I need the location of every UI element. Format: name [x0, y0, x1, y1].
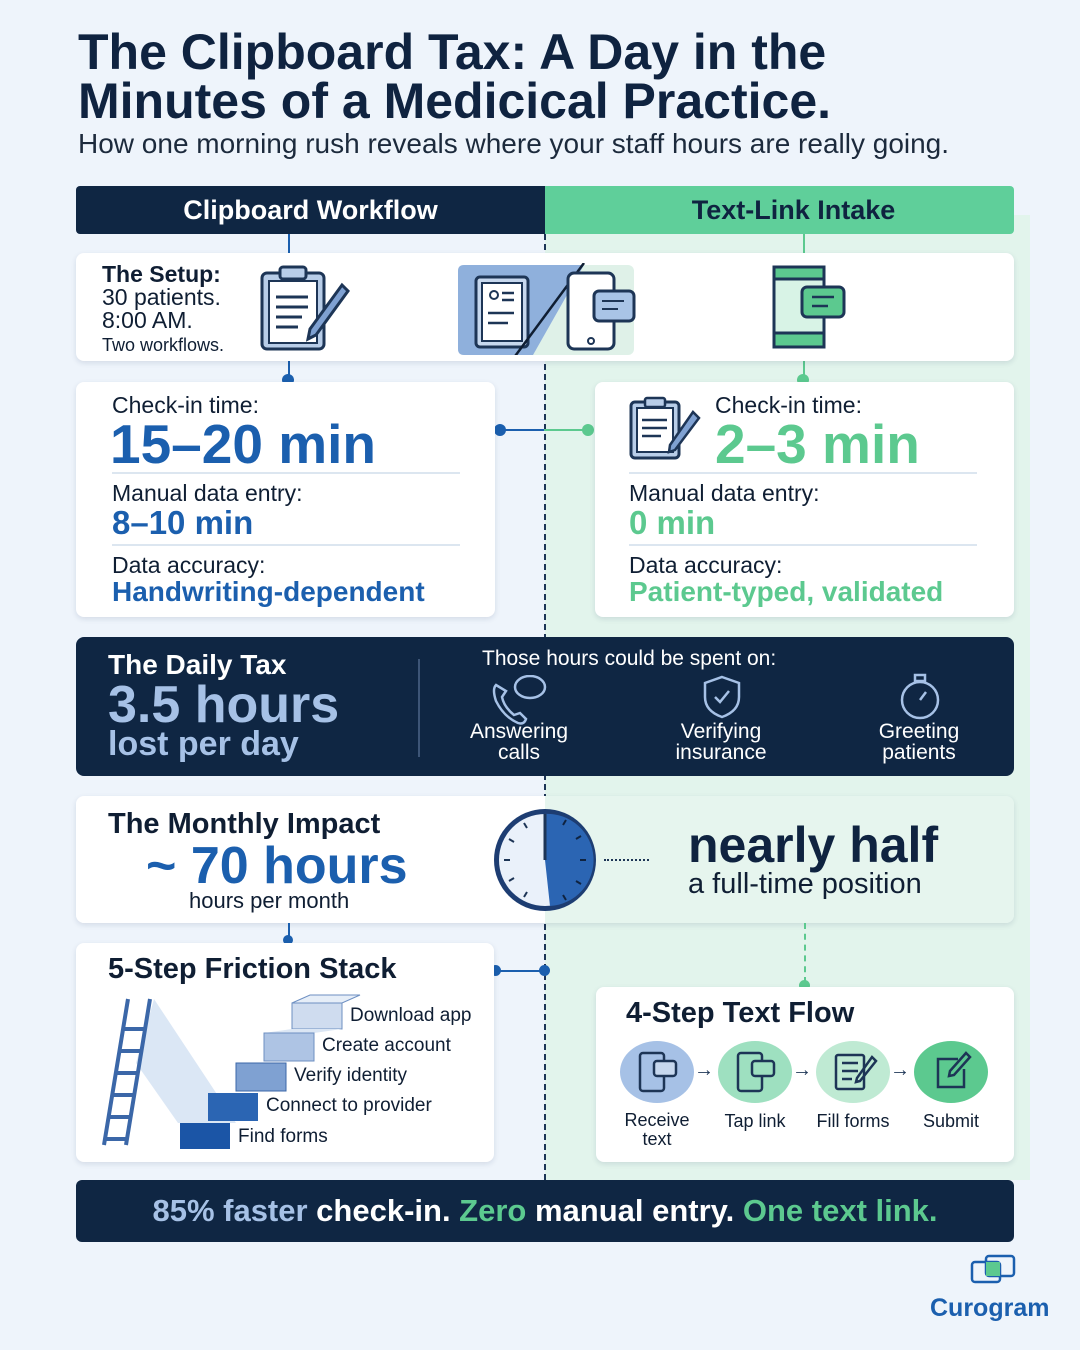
flow steps: →: [694, 1059, 714, 1081]
flow steps: Fill forms: [816, 1111, 890, 1131]
panel: text-link check-in: Check-in time:: [715, 392, 862, 418]
flow steps: Submit: [923, 1111, 979, 1131]
panel: clipboard check-in: Data accuracy:: [112, 552, 265, 578]
panel: friction stack: Find forms: [238, 1126, 328, 1147]
panel: text flow: 4-Step Text Flow: [626, 997, 854, 1029]
header bar: Clipboard Workflow: [183, 195, 438, 225]
bottom banner: 85% faster check-in. Zero manual entry. One text link.: [152, 1193, 938, 1228]
panel: clipboard check-in: 8–10 min: [112, 504, 253, 541]
flow steps: text: [642, 1129, 672, 1149]
icon: ladder and stairs: [102, 994, 360, 1149]
panel: text flow: [596, 987, 1014, 1162]
panel: daily tax: calls: [498, 741, 540, 764]
panel: setup: [76, 253, 1014, 361]
flow steps: Receive: [624, 1110, 690, 1130]
panel: daily tax: insurance: [675, 741, 767, 764]
panel: clipboard check-in: 15–20 min: [110, 413, 376, 475]
title: The Clipboard Tax: A Day in the Minutes of a Medicical Practice.: [78, 24, 831, 129]
setup text: 8:00 AM.: [102, 307, 193, 333]
panel: monthly impact: ~ 70 hours: [146, 837, 408, 895]
panel: daily tax: Those hours could be spent on:: [482, 647, 776, 670]
header bar: [76, 186, 1014, 234]
connector check-in: [495, 424, 594, 436]
panel: monthly impact: [76, 796, 1014, 923]
flow steps: →: [792, 1059, 812, 1081]
bottom banner: [76, 1180, 1014, 1242]
panel: text-link check-in: Manual data entry:: [629, 480, 820, 506]
panel: text-link check-in: Data accuracy:: [629, 552, 782, 578]
panel: clipboard check-in: Check-in time:: [112, 392, 259, 418]
flow steps: Tap link: [724, 1111, 786, 1131]
icon: clipboard: [260, 266, 350, 350]
panel: daily tax: [76, 637, 1014, 776]
panel: clipboard check-in: Manual data entry:: [112, 480, 303, 506]
panel: friction stack: Connect to provider: [266, 1095, 432, 1116]
panel: daily tax: Answering: [470, 720, 568, 743]
panel: friction stack: [76, 943, 494, 1162]
panel: monthly impact: a full-time position: [688, 868, 922, 900]
icon: clock: [494, 809, 596, 911]
panel: text-link check-in: Patient-typed, validated: [629, 576, 943, 607]
flow steps: →: [890, 1059, 910, 1081]
panel: daily tax: lost per day: [108, 725, 299, 763]
flow steps: [620, 1041, 988, 1149]
panel: daily tax: patients: [882, 741, 956, 764]
icon: stopwatch: [900, 674, 940, 720]
panel: friction stack: 5-Step Friction Stack: [108, 953, 396, 985]
panel: daily tax: Greeting: [879, 720, 959, 743]
setup text: [102, 261, 224, 355]
panel: clipboard check-in: Handwriting-dependent: [112, 576, 425, 607]
panel: friction stack: Create account: [322, 1035, 451, 1056]
setup text: Two workflows.: [102, 335, 224, 355]
setup text: 30 patients.: [102, 284, 221, 310]
subtitle: How one morning rush reveals where your staff hours are really going.: [78, 128, 949, 159]
panel: monthly impact: The Monthly Impact: [108, 808, 380, 840]
panel: daily tax: 3.5 hours: [108, 676, 339, 734]
panel: text-link check-in: 2–3 min: [715, 413, 920, 475]
logo: [930, 1254, 1049, 1322]
panel: text-link check-in: [595, 382, 1014, 617]
panel: monthly impact: nearly half: [688, 817, 938, 873]
icon: green phone: [772, 266, 846, 348]
icon: split clipboard phone: [458, 263, 636, 355]
panel: friction stack: Verify identity: [294, 1065, 407, 1086]
panel: monthly impact: hours per month: [189, 888, 349, 913]
icon: clipboard small: [630, 396, 701, 460]
icon: shield: [704, 676, 740, 718]
panel: text-link check-in: 0 min: [629, 504, 715, 541]
setup text: The Setup:: [102, 261, 221, 287]
panel: clipboard check-in: [76, 382, 495, 617]
header bar: Text-Link Intake: [692, 195, 895, 225]
panel: daily tax: The Daily Tax: [108, 649, 286, 680]
logo: Curogram: [930, 1294, 1049, 1322]
icon: calls: [492, 675, 546, 725]
panel: daily tax: Verifying: [681, 720, 761, 743]
panel: friction stack: Download app: [350, 1005, 471, 1026]
